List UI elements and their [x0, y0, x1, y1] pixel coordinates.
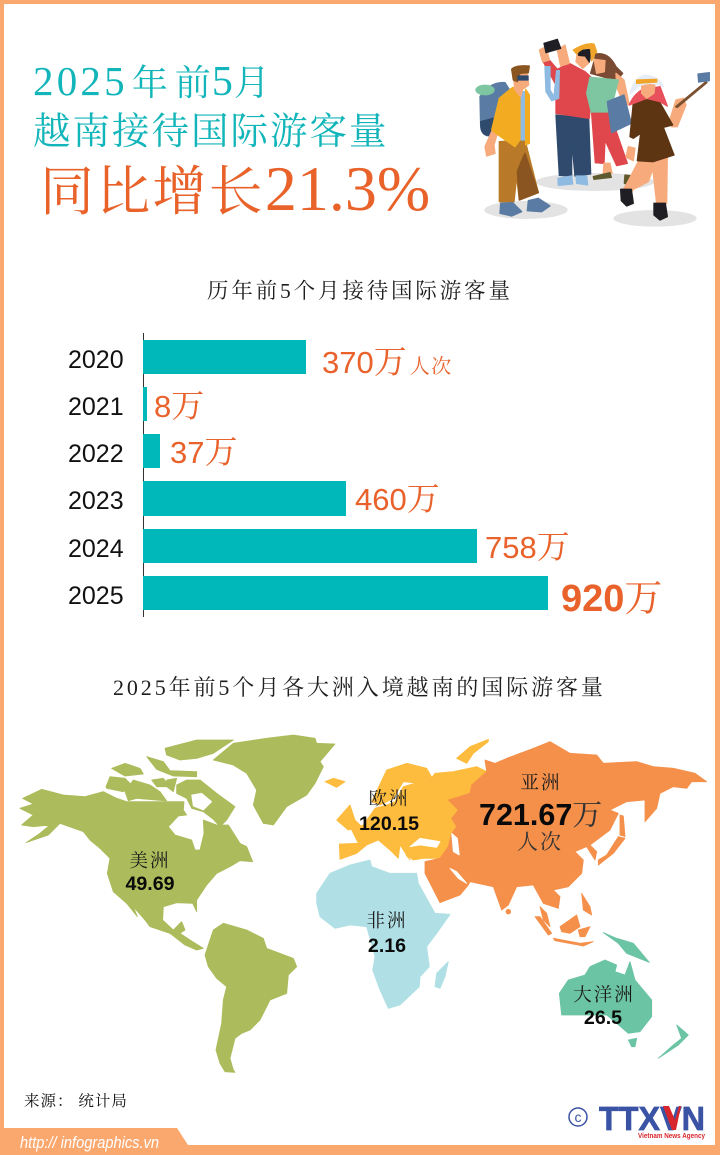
label: Europe: 欧洲 [368, 785, 410, 811]
row 2020: 2020 [68, 346, 124, 374]
label: Africa [366, 907, 408, 957]
label: Asia: 721.67万 [479, 790, 602, 834]
footer tab with URL [4, 1128, 188, 1152]
illustration: group of tourists [475, 38, 710, 226]
row 2020: 370万人次 [322, 336, 453, 383]
source note: 来源： 统计局 [24, 1093, 128, 1110]
copyright mark: c [574, 1109, 582, 1125]
row 2020 [68, 336, 453, 383]
tourist with tote bag [587, 54, 632, 185]
row 2024 [68, 521, 570, 568]
row 2022: 37万 [170, 426, 237, 473]
row 2023 [68, 473, 440, 520]
heading: map: 2025年前5个月各大洲入境越南的国际游客量 [113, 675, 606, 700]
row 2023: 2023 [68, 487, 124, 515]
label: Oceania: 26.5 [584, 1007, 622, 1029]
label: Americas: 美洲 [129, 847, 171, 873]
tagline: Vietnam News Agency [638, 1133, 705, 1140]
row 2021 [68, 380, 204, 427]
logo: TTXVN [568, 1100, 705, 1140]
heading: bar chart: 历年前5个月接待国际游客量 [207, 279, 513, 303]
row 2022: 2022 [68, 440, 124, 468]
row 2025 [68, 567, 662, 622]
label: Oceania: 大洋洲 [573, 981, 635, 1007]
label: Asia: 亚洲 [520, 769, 562, 795]
row 2025: 2025 [68, 582, 124, 610]
row 2023: 460万 [355, 473, 440, 520]
row 2024: 2024 [68, 535, 124, 563]
row 2021: 8万 [154, 380, 204, 427]
red V accent [663, 1106, 681, 1130]
label: Europe: 120.15 [359, 813, 419, 835]
copyright mark [569, 1108, 587, 1126]
tourist with camera [539, 39, 597, 185]
axis line [143, 333, 144, 617]
label: Americas: 49.69 [125, 873, 175, 895]
row 2025: 920万 [561, 567, 662, 622]
label: Africa: 非洲 [366, 907, 408, 933]
row 2022 [68, 426, 237, 473]
tourist with selfie stick [621, 73, 709, 220]
label: Asia [479, 769, 602, 856]
row 2021: 2021 [68, 393, 124, 421]
map: Africa [317, 860, 450, 1008]
map: Americas [20, 735, 335, 1072]
footer tab with URL: http:// infographics.vn [20, 1133, 159, 1152]
map: Europe [325, 739, 488, 860]
ground shadows [484, 173, 697, 227]
tourist with backpack [476, 66, 550, 216]
title line 2: 越南接待国际游客量 [33, 112, 388, 153]
label: Asia: 人次 [517, 826, 563, 856]
title line 3: 同比增长21.3% [40, 153, 430, 224]
label: Oceania [573, 981, 635, 1029]
label: Americas [125, 847, 175, 895]
title line 1: 2025年前5月 [33, 58, 270, 105]
bar chart: arrivals by year [68, 333, 662, 622]
wordmark: TTXVN [599, 1100, 705, 1137]
label: Africa: 2.16 [368, 935, 406, 957]
row 2024: 758万 [485, 521, 570, 568]
label: Europe [359, 785, 419, 835]
title [33, 58, 430, 224]
map: Oceania [559, 933, 688, 1058]
map: Asia [425, 742, 707, 946]
